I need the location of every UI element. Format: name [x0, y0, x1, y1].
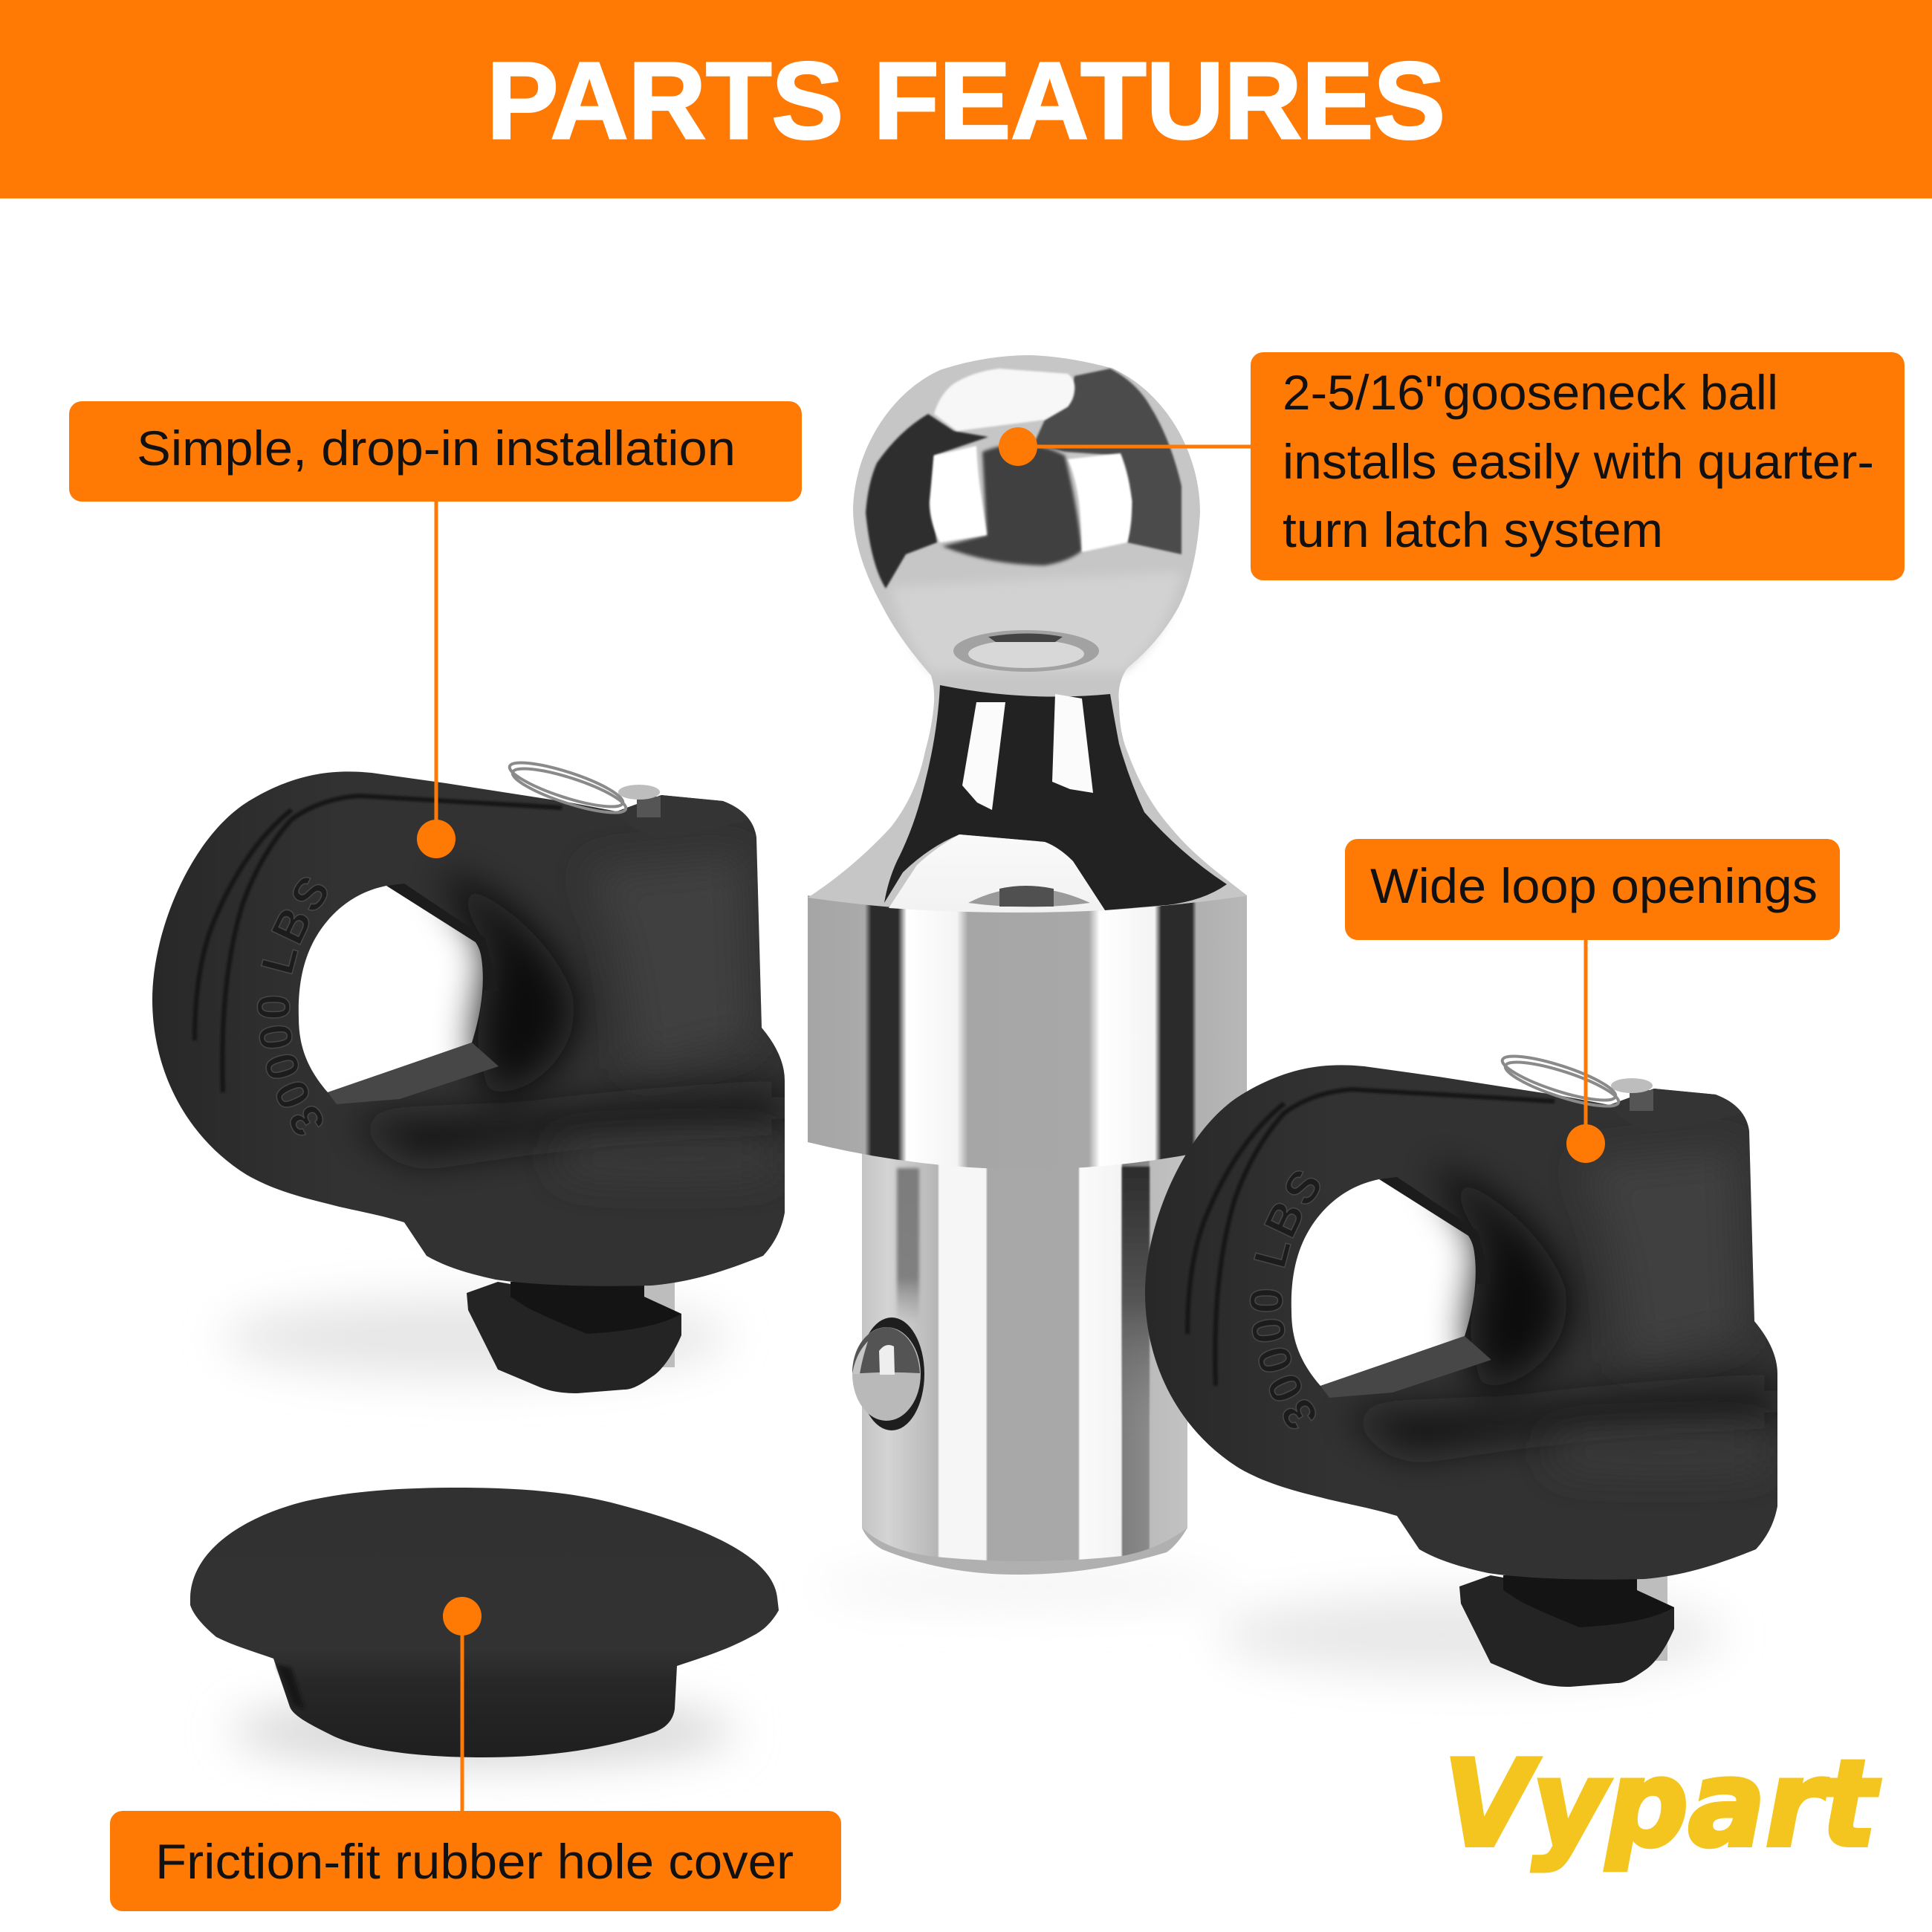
- rubber hole cover: [190, 1488, 779, 1757]
- ball and flared neck silhouette: [808, 355, 1247, 912]
- callout: drop-in installation: [69, 401, 802, 858]
- retaining ring and pin: [506, 754, 661, 821]
- ball bottom hole: [953, 630, 1099, 672]
- ball lower glow: [892, 572, 1181, 672]
- collar: [808, 895, 1247, 1170]
- soft floor shadows: [223, 1297, 1724, 1765]
- top face and hole inner faces: [1320, 1089, 1741, 1398]
- left hitch link: 30000 LBS: [257, 877, 328, 1135]
- callout: wide loop openings: [1345, 839, 1840, 1163]
- rim grooves: [1187, 1089, 1555, 1386]
- callout: gooseneck ball: installs easily with quarter-: [1283, 434, 1874, 489]
- callout: rubber hole cover: [110, 1597, 841, 1911]
- neck reflections: [884, 685, 1227, 912]
- callout: gooseneck ball: [999, 352, 1905, 580]
- embossed load rating: [1283, 1164, 1342, 1417]
- top face and hole inner faces: [328, 795, 748, 1104]
- title: PARTS FEATURES: [487, 40, 1445, 162]
- ball reflections: [866, 369, 1181, 589]
- retaining ring and pin: [1499, 1048, 1653, 1115]
- rim grooves: [195, 796, 562, 1092]
- callout: drop-in installation: Simple, drop-in installation: [137, 421, 736, 476]
- ball shank: [862, 1152, 1187, 1575]
- callout: gooseneck ball: 2-5/16"gooseneck ball: [1283, 365, 1778, 420]
- right hitch link: 30000 LBS: [1250, 1170, 1320, 1430]
- link body: [152, 771, 785, 1286]
- embossed load rating: [290, 871, 349, 1124]
- right hitch link: [1145, 1055, 1777, 1687]
- callout: gooseneck ball: turn latch system: [1283, 502, 1663, 557]
- left hitch link: [152, 761, 785, 1393]
- callout: rubber hole cover: Friction-fit rubber hole cover: [155, 1834, 794, 1889]
- stud and locking foot: [1459, 1575, 1674, 1687]
- stud and locking foot: [467, 1282, 681, 1393]
- link body: [1145, 1065, 1777, 1580]
- header banner: [0, 0, 1932, 198]
- locking ball bearing: [852, 1317, 924, 1430]
- brand logo: Vypart: [1444, 1734, 1880, 1873]
- product: chrome gooseneck ball: [808, 355, 1247, 1575]
- callout: wide loop openings: Wide loop openings: [1370, 858, 1818, 913]
